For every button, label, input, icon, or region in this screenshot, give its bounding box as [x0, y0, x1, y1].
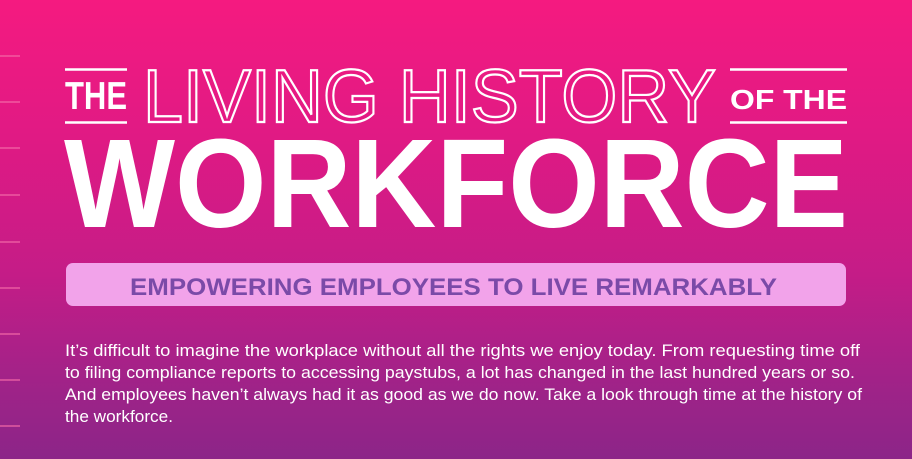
- intro paragraph: the workforce.: [65, 408, 173, 426]
- banner: subtitle: EMPOWERING EMPLOYEES TO LIVE REMARKABLY: [130, 274, 777, 301]
- banner: subtitle: [66, 263, 846, 306]
- intro paragraph: And employees haven’t always had it as good as we do now. Take a look through time at the history of: [65, 386, 862, 404]
- title: OF THE: OF THE: [730, 84, 847, 115]
- title: [64, 54, 848, 254]
- intro paragraph: to filing compliance reports to accessing paystubs, a lot has changed in the last hundred years or so.: [65, 364, 855, 382]
- intro paragraph: [65, 342, 862, 426]
- intro paragraph: It’s difficult to imagine the workplace without all the rights we enjoy today. From requesting time off: [65, 342, 860, 360]
- title: WORKFORCE: WORKFORCE: [64, 113, 848, 254]
- title: LIVING HISTORY outline: LIVING HISTORY: [143, 54, 716, 138]
- title: THE: [65, 70, 127, 122]
- title: OF THE: [730, 70, 847, 122]
- title: THE: THE: [65, 75, 127, 118]
